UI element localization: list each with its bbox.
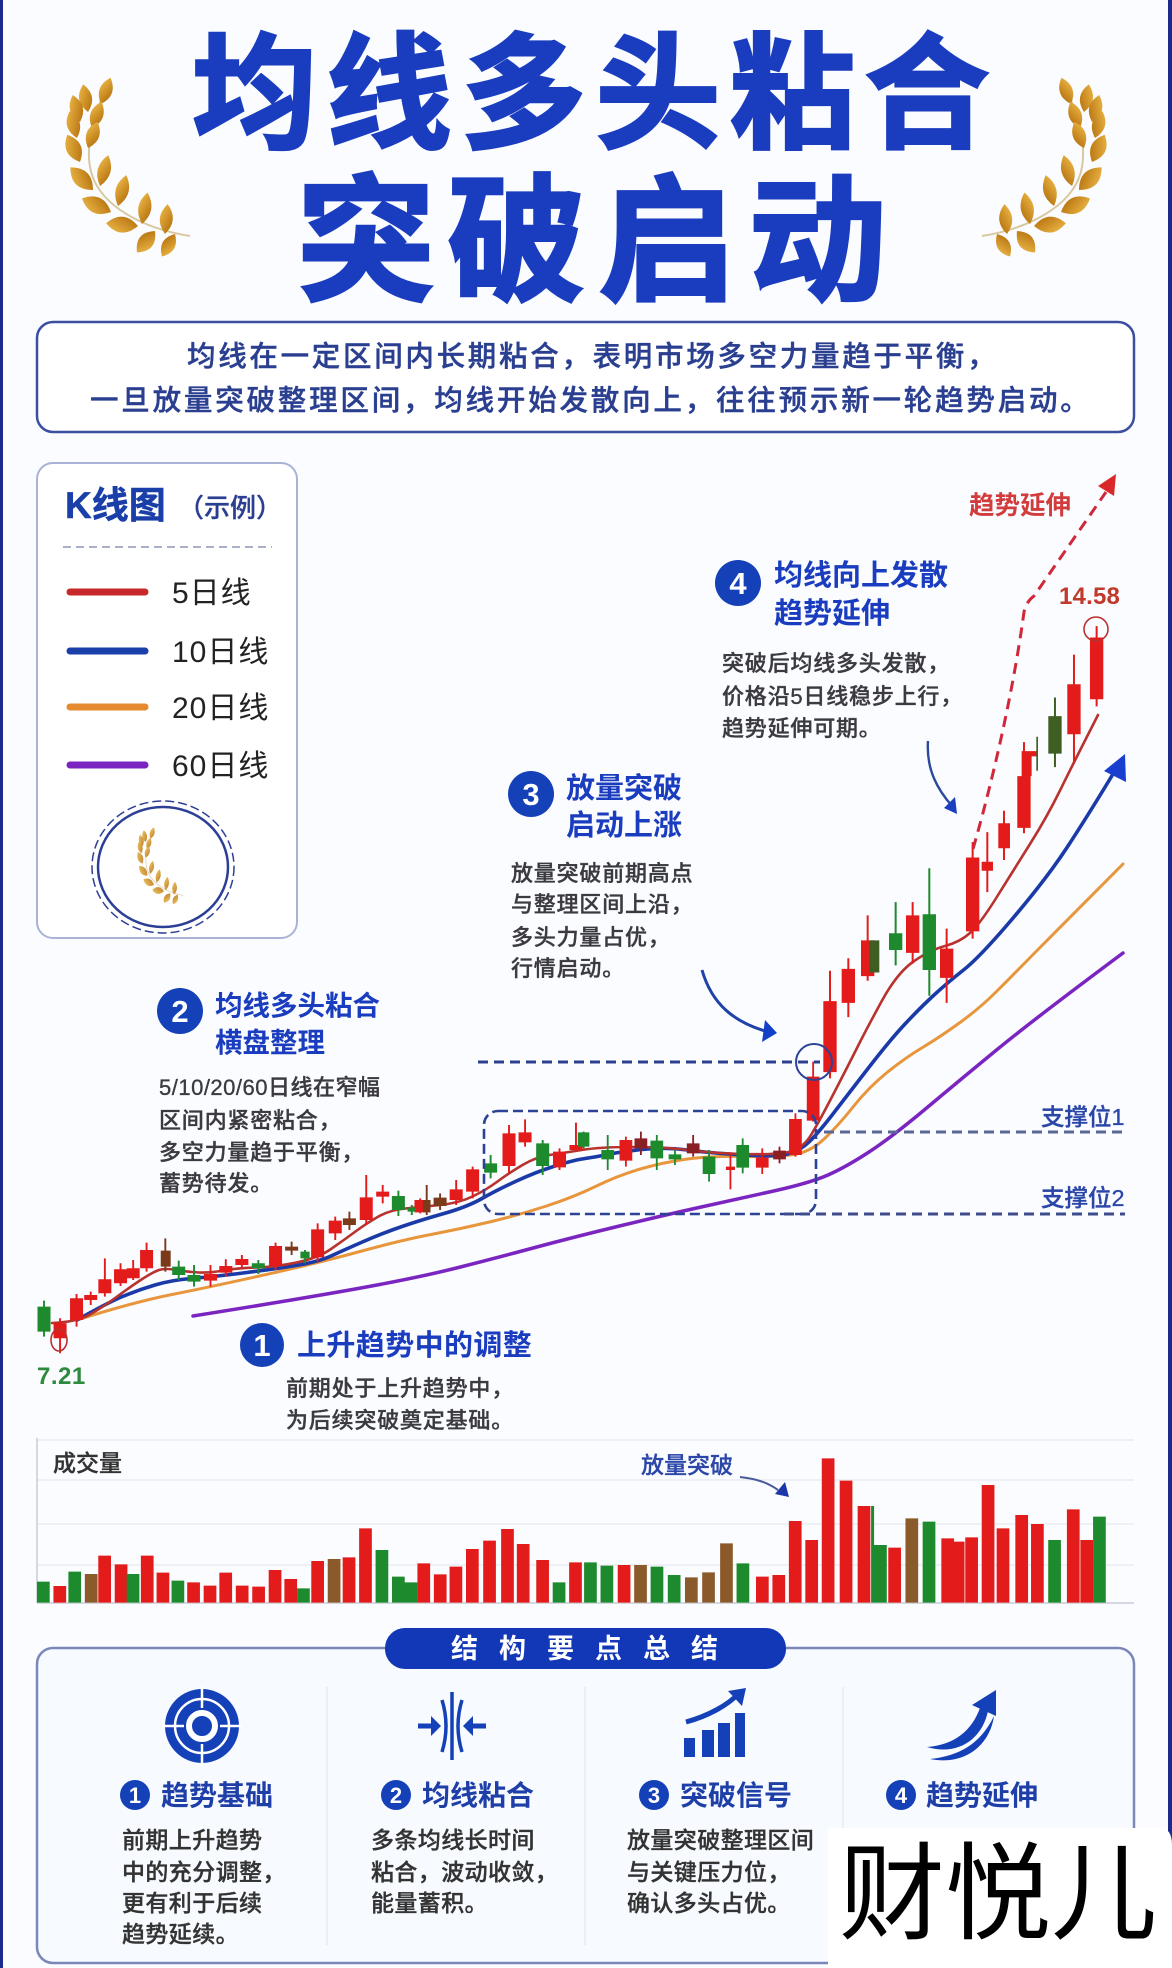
callout 4: 突破后均线多头发散，: [722, 651, 950, 676]
10 day line: [77, 774, 1113, 1320]
summary 2: 能量蓄积。: [371, 1890, 488, 1916]
volume breakout arrow: [740, 1477, 789, 1497]
arrow: to step 3: [702, 970, 777, 1042]
icon: converge: [418, 1692, 486, 1760]
callout 1: [240, 1323, 532, 1433]
laurel left: [61, 75, 190, 260]
summary 2: 均线粘合: [422, 1780, 534, 1811]
chart: candles left: [38, 1119, 589, 1353]
5 day line: [52, 715, 1098, 1323]
callout 3: 多头力量占优，: [511, 925, 671, 950]
10 day arrow head: [1104, 754, 1126, 782]
summary 4: 趋势延伸: [926, 1780, 1038, 1811]
trend extension label: 趋势延伸: [969, 492, 1071, 520]
summary 2: 2: [390, 1783, 402, 1808]
breakout level line: [478, 1060, 820, 1064]
callout 3: 与整理区间上沿，: [511, 892, 693, 917]
summary 3: 与关键压力位，: [627, 1859, 791, 1885]
title: [192, 26, 999, 320]
consolidation zone box: [484, 1111, 816, 1214]
volume breakout label: 放量突破: [641, 1452, 733, 1478]
title: 均线多头粘合: [192, 26, 999, 165]
high price marker: [1059, 583, 1120, 641]
summary 1: 1: [129, 1783, 141, 1808]
summary 2: 多条均线长时间: [371, 1827, 535, 1853]
callout 1: 上升趋势中的调整: [297, 1329, 532, 1362]
low price marker: [37, 1329, 86, 1390]
support 2 label: 支撑位2: [1041, 1185, 1125, 1211]
breakout circle: [796, 1044, 832, 1080]
legend note: （示例）: [178, 493, 282, 523]
summary 1: 趋势延续。: [122, 1921, 239, 1947]
intro box: [37, 322, 1134, 432]
callout 3: 放量突破: [566, 772, 682, 805]
callout 3: 放量突破前期高点: [511, 861, 693, 886]
chart: volume: [37, 1438, 1134, 1603]
callout 2: 2: [171, 994, 189, 1029]
emblem: [92, 801, 234, 933]
summary 2: 粘合，波动收敛，: [371, 1859, 558, 1885]
chart: candles middle: [601, 1062, 820, 1189]
callout 2: 均线多头粘合: [215, 990, 380, 1021]
icon: target: [162, 1686, 242, 1766]
summary 3: [627, 1780, 814, 1916]
callout 2: 多空力量趋于平衡，: [159, 1140, 364, 1165]
summary 3: 放量突破整理区间: [627, 1827, 814, 1853]
high price marker: 14.58: [1059, 583, 1120, 610]
callout 4: 均线向上发散: [774, 559, 948, 592]
60 day line: [193, 953, 1123, 1316]
callout 3: [508, 771, 693, 981]
callout 3: 行情启动。: [511, 956, 625, 981]
legend title: K线图: [65, 485, 166, 526]
summary 1: 更有利于后续: [122, 1890, 262, 1916]
summary 1: [120, 1780, 286, 1947]
support 1 line: [824, 1130, 1125, 1134]
callout 3: 启动上涨: [566, 809, 682, 842]
title: 突破启动: [297, 166, 899, 320]
legend row 20: 20日线: [172, 692, 269, 725]
arrow: trend extension dashed: [973, 474, 1116, 849]
legend row 5: 5日线: [172, 577, 252, 610]
summary 1: 前期上升趋势: [122, 1827, 262, 1853]
volume title: 成交量: [53, 1450, 122, 1476]
summary heading pill: 结构要点总结: [451, 1634, 739, 1664]
summary 4: 4: [895, 1783, 908, 1808]
support 2 line: [784, 1212, 1125, 1216]
summary 3: 突破信号: [680, 1780, 792, 1811]
laurel right: [982, 75, 1111, 260]
callout 2: 区间内紧密粘合，: [159, 1108, 341, 1133]
callout 1: 前期处于上升趋势中，: [286, 1376, 514, 1401]
callout 3: 3: [522, 777, 540, 812]
summary 3: 确认多头占优。: [627, 1890, 791, 1916]
summary 3: 3: [648, 1783, 660, 1808]
arrow: to step 4: [928, 741, 957, 814]
callout 4: [715, 559, 963, 741]
support 1 label: 支撑位1: [1041, 1104, 1125, 1130]
volume bars: [37, 1458, 1106, 1603]
panel: summary: [37, 1628, 1134, 1963]
chart: moving averages: [52, 715, 1126, 1323]
low price marker: 7.21: [37, 1363, 86, 1390]
intro box: 均线在一定区间内长期粘合，表明市场多空力量趋于平衡，: [187, 341, 998, 373]
summary 1: 趋势基础: [161, 1780, 273, 1811]
callout 2: 横盘整理: [215, 1027, 325, 1058]
summary heading pill: [385, 1628, 786, 1669]
summary 1: 中的充分调整，: [122, 1859, 286, 1885]
legend row 60: 60日线: [172, 750, 269, 783]
callout 2: [157, 988, 380, 1196]
callout 4: 4: [729, 566, 747, 601]
icon: extension arrow: [927, 1690, 996, 1760]
intro box: 一旦放量突破整理区间，均线开始发散向上，往往预示新一轮趋势启动。: [90, 385, 1092, 417]
icon: rising bars: [684, 1688, 746, 1757]
callout 4: 趋势延伸可期。: [722, 716, 882, 741]
20 day line: [77, 864, 1123, 1320]
callout 1: 为后续突破奠定基础。: [286, 1408, 514, 1433]
legend row 10: 10日线: [172, 636, 269, 669]
chart: candles right: [823, 626, 1103, 1078]
callout 1: 1: [253, 1328, 271, 1363]
callout 4: 趋势延伸: [774, 597, 890, 630]
watermark: 财悦儿: [839, 1836, 1157, 1954]
callout 2: 蓄势待发。: [159, 1171, 273, 1196]
callout 2: 5/10/20/60日线在窄幅: [159, 1075, 380, 1100]
summary 2: [371, 1780, 558, 1916]
callout 4: 价格沿5日线稳步上行，: [722, 684, 963, 709]
panel: legend: [37, 463, 297, 938]
